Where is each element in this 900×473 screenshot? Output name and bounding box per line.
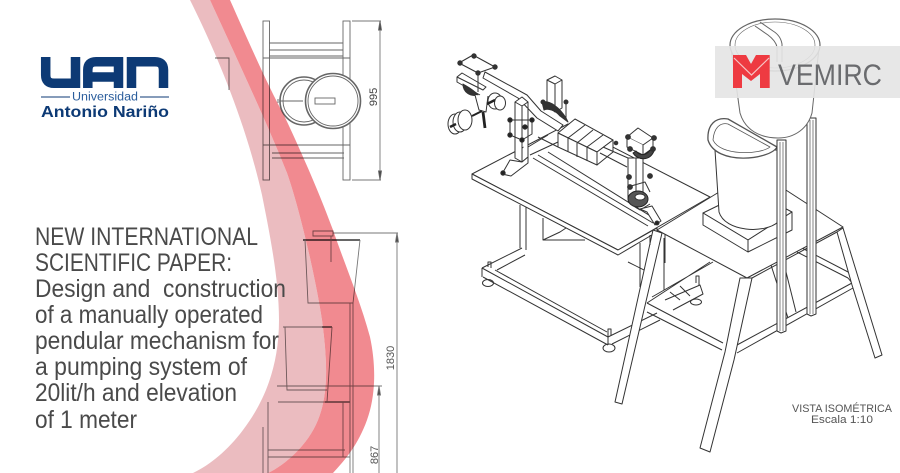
headline text block: a pumping system of xyxy=(35,353,247,381)
base rails on table xyxy=(528,135,660,226)
headline text block: 20lit/h and elevation xyxy=(35,379,237,407)
logo word Universidad: Universidad xyxy=(72,92,138,104)
caption: vista isometrica: Escala 1:10 xyxy=(811,414,873,426)
caption: vista isometrica: VISTA ISOMÉTRICA xyxy=(792,402,893,415)
headline text block: Design and construction xyxy=(35,275,286,303)
headline text block: NEW INTERNATIONAL xyxy=(35,223,258,251)
vertical tower with clamp xyxy=(541,76,568,122)
isometric drawing of the pump machine xyxy=(448,19,882,452)
logo: Universidad Antonio Nariño xyxy=(41,57,169,121)
red curved ribbon xyxy=(190,0,374,473)
ribbon: strong band xyxy=(210,0,374,473)
word VEMIRC: VEMIRC xyxy=(778,59,882,92)
logo: VEMIRC banner xyxy=(715,46,900,98)
pump stand legs xyxy=(615,228,882,452)
headline text block: of a manually operated xyxy=(35,301,263,329)
banner background xyxy=(715,46,900,98)
headline text block: pendular mechanism for xyxy=(35,327,279,355)
dimension label 995: 995 xyxy=(368,88,380,106)
right clamps and post xyxy=(626,128,661,225)
ribbon: pale band xyxy=(190,0,326,473)
dimension label 867: 867 xyxy=(369,446,381,464)
pump stand lower frame xyxy=(647,247,853,353)
pendulum head with plate and weights xyxy=(448,54,506,134)
headline text block: SCIENTIFIC PAPER: xyxy=(35,249,232,277)
headline text block: of 1 meter xyxy=(35,406,137,434)
caption: vista isometrica xyxy=(792,402,893,426)
tall support posts xyxy=(777,118,816,333)
headline text block xyxy=(35,223,286,434)
icon: red M mark xyxy=(733,55,770,88)
upper tank xyxy=(730,19,820,138)
tank base block xyxy=(703,190,792,252)
technical drawing: side view with dimensions xyxy=(263,231,398,473)
technical drawing: top view with dimensions xyxy=(215,21,382,180)
dimension label 1830: 1830 xyxy=(385,346,397,370)
logo letters UAN xyxy=(46,57,164,88)
central weight block xyxy=(558,119,628,167)
pump stand table top xyxy=(657,170,843,278)
logo words Antonio Nariño: Antonio Nariño xyxy=(41,104,169,121)
pendulum arm and left post xyxy=(483,72,563,176)
mechanism table top xyxy=(472,124,710,255)
lower frame of mechanism table xyxy=(482,205,703,352)
lower tank xyxy=(708,119,778,229)
